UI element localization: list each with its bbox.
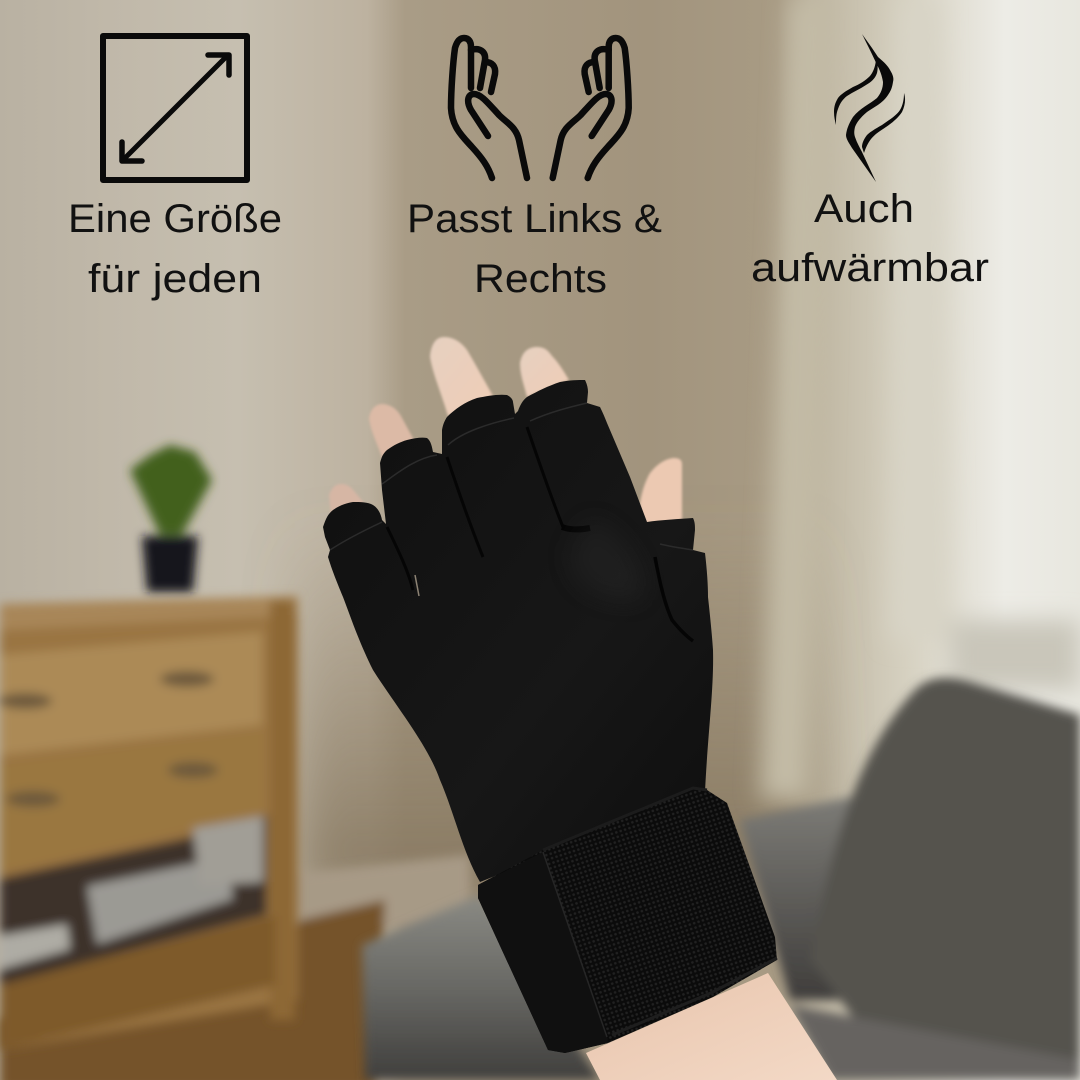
label: one size: für jeden [88,257,262,301]
sofa [362,678,1080,1080]
label: also heatable [751,187,989,290]
small gap of light between fingers [415,575,419,596]
label: one size [68,197,282,301]
glove finger seams and gaps [330,403,693,641]
glove body [323,380,713,882]
icon: resize arrow in square [103,36,247,180]
baseboard and floor [0,855,470,1080]
icon: heat flame [834,34,905,182]
cabinet [0,596,298,1050]
glove sheen [570,520,642,600]
photo: hand wearing glove [323,337,837,1080]
label: one size: Eine Größe [68,197,282,241]
plant [130,445,212,592]
label: fits left and right [407,197,662,301]
label: fits left and right: Passt Links & [407,197,662,241]
velcro wrist strap [478,788,777,1053]
forearm [586,973,837,1080]
label: fits left and right: Rechts [474,257,607,301]
icon: two hands [451,38,629,178]
label: also heatable: Auch [814,187,914,231]
fingertips [329,337,682,525]
label: also heatable: aufwärmbar [751,246,989,290]
